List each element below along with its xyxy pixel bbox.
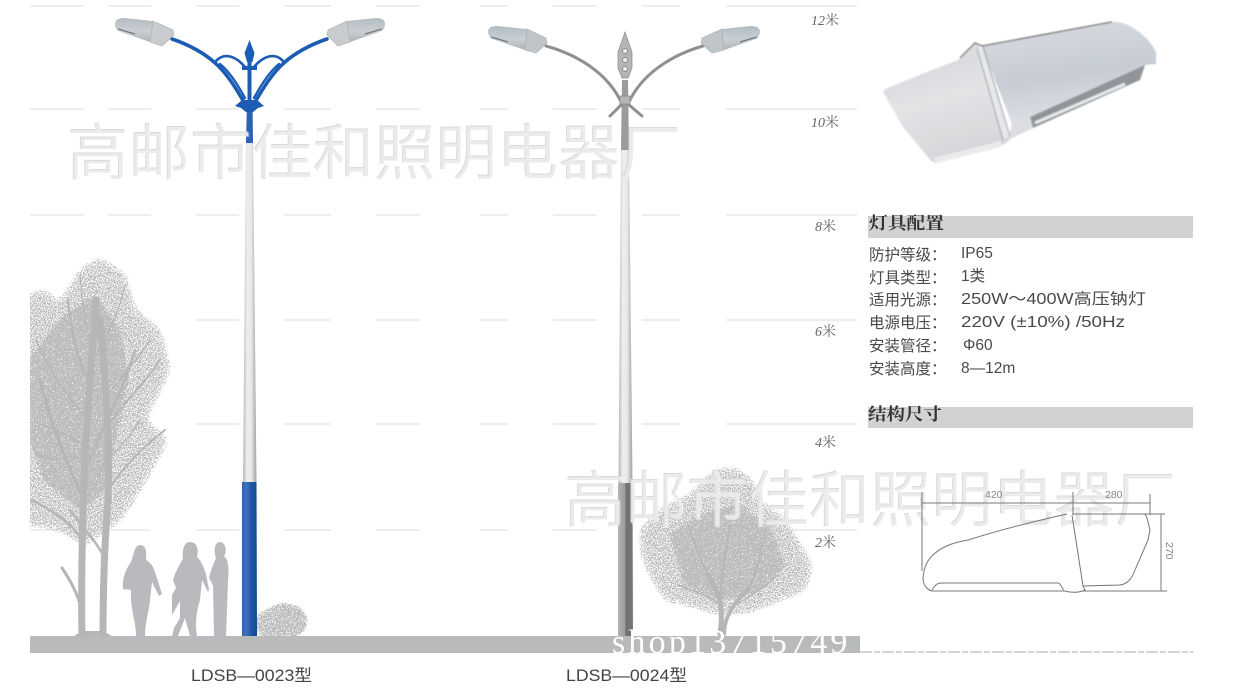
spec list: Φ60 — [963, 337, 993, 354]
lower grey pole section — [618, 483, 633, 636]
panel: luminaire configuration — [868, 214, 1193, 378]
upper blue pole section — [246, 100, 253, 143]
lamp glass — [1030, 65, 1145, 128]
right lamp head — [701, 26, 760, 53]
person 1 — [123, 545, 162, 636]
height labels: 4米 — [815, 434, 836, 451]
spec list: 250W～400W高压钠灯 — [961, 290, 1146, 308]
ground strip — [30, 636, 860, 653]
upper grey pole section — [621, 80, 629, 150]
height grid lines — [30, 6, 857, 530]
heading: 结构尺寸 — [868, 404, 942, 424]
heading band — [868, 216, 1193, 238]
fleur finial and collar — [235, 40, 264, 112]
shop watermark clipped at ground: shop13715749 — [612, 624, 851, 661]
model label 0024: LDSB—0024型 — [566, 666, 687, 685]
spec list: 电源电压： — [869, 314, 947, 332]
spec list: 适用光源： — [869, 291, 947, 309]
panel: structural dimensions — [868, 404, 1193, 592]
spec list: 安装高度： — [869, 360, 947, 378]
person 2 — [172, 542, 209, 636]
heading band — [868, 407, 1193, 428]
spec list: IP65 — [961, 245, 993, 262]
watermark two: 高邮市佳和照明电器厂 — [564, 466, 1176, 534]
lamp rear housing — [883, 43, 1010, 163]
spec list: 灯具类型： — [869, 269, 947, 287]
heading: 灯具配置 — [868, 214, 944, 233]
lamp front hood — [982, 22, 1156, 124]
lamp clamp band — [979, 47, 1006, 138]
watermark one: 高邮市佳和照明电器厂 — [68, 120, 682, 188]
spec list — [869, 245, 1146, 378]
pole 1 blue — [115, 18, 385, 636]
leaf finial and collar — [618, 32, 632, 104]
spec list: 8—12m — [961, 360, 1015, 377]
height labels: 6米 — [815, 323, 836, 340]
right lamp head — [327, 18, 385, 46]
people silhouettes — [123, 542, 229, 636]
watermark two: 高邮市佳和照明电器厂 — [565, 467, 1177, 535]
spec list: 1类 — [961, 267, 985, 285]
dashed ground line — [860, 651, 1193, 653]
height labels: 12米 — [811, 12, 839, 29]
height labels: 10米 — [811, 114, 839, 131]
spec list: 安装管径： — [869, 337, 947, 355]
model label 0023: LDSB—0023型 — [191, 666, 312, 685]
left lamp head — [115, 18, 174, 46]
low shrub — [257, 603, 307, 636]
height labels: 8米 — [815, 218, 836, 235]
person 3 — [209, 542, 229, 636]
round tree silhouette — [640, 468, 812, 634]
tall tree silhouette — [10, 258, 170, 636]
left lamp head — [488, 26, 547, 53]
watermark one: 高邮市佳和照明电器厂 — [67, 119, 681, 187]
dimension diagram — [922, 492, 1167, 592]
blue ornamental arms — [172, 39, 327, 104]
dimension 270: 270 — [1163, 542, 1175, 560]
white pole section — [243, 143, 256, 482]
spec list: 防护等级： — [869, 246, 947, 264]
height labels: 2米 — [815, 534, 836, 551]
white pole section — [618, 150, 632, 483]
dimension 420: 420 — [985, 489, 1003, 501]
height labels — [811, 12, 839, 551]
grey curved arms — [546, 46, 703, 116]
pole 2 grey — [488, 26, 760, 636]
spec list: 220V (±10%) /50Hz — [961, 314, 1125, 331]
product lamp photo — [883, 22, 1156, 163]
dimension 280: 280 — [1105, 489, 1123, 501]
lower blue pole section — [242, 482, 257, 636]
